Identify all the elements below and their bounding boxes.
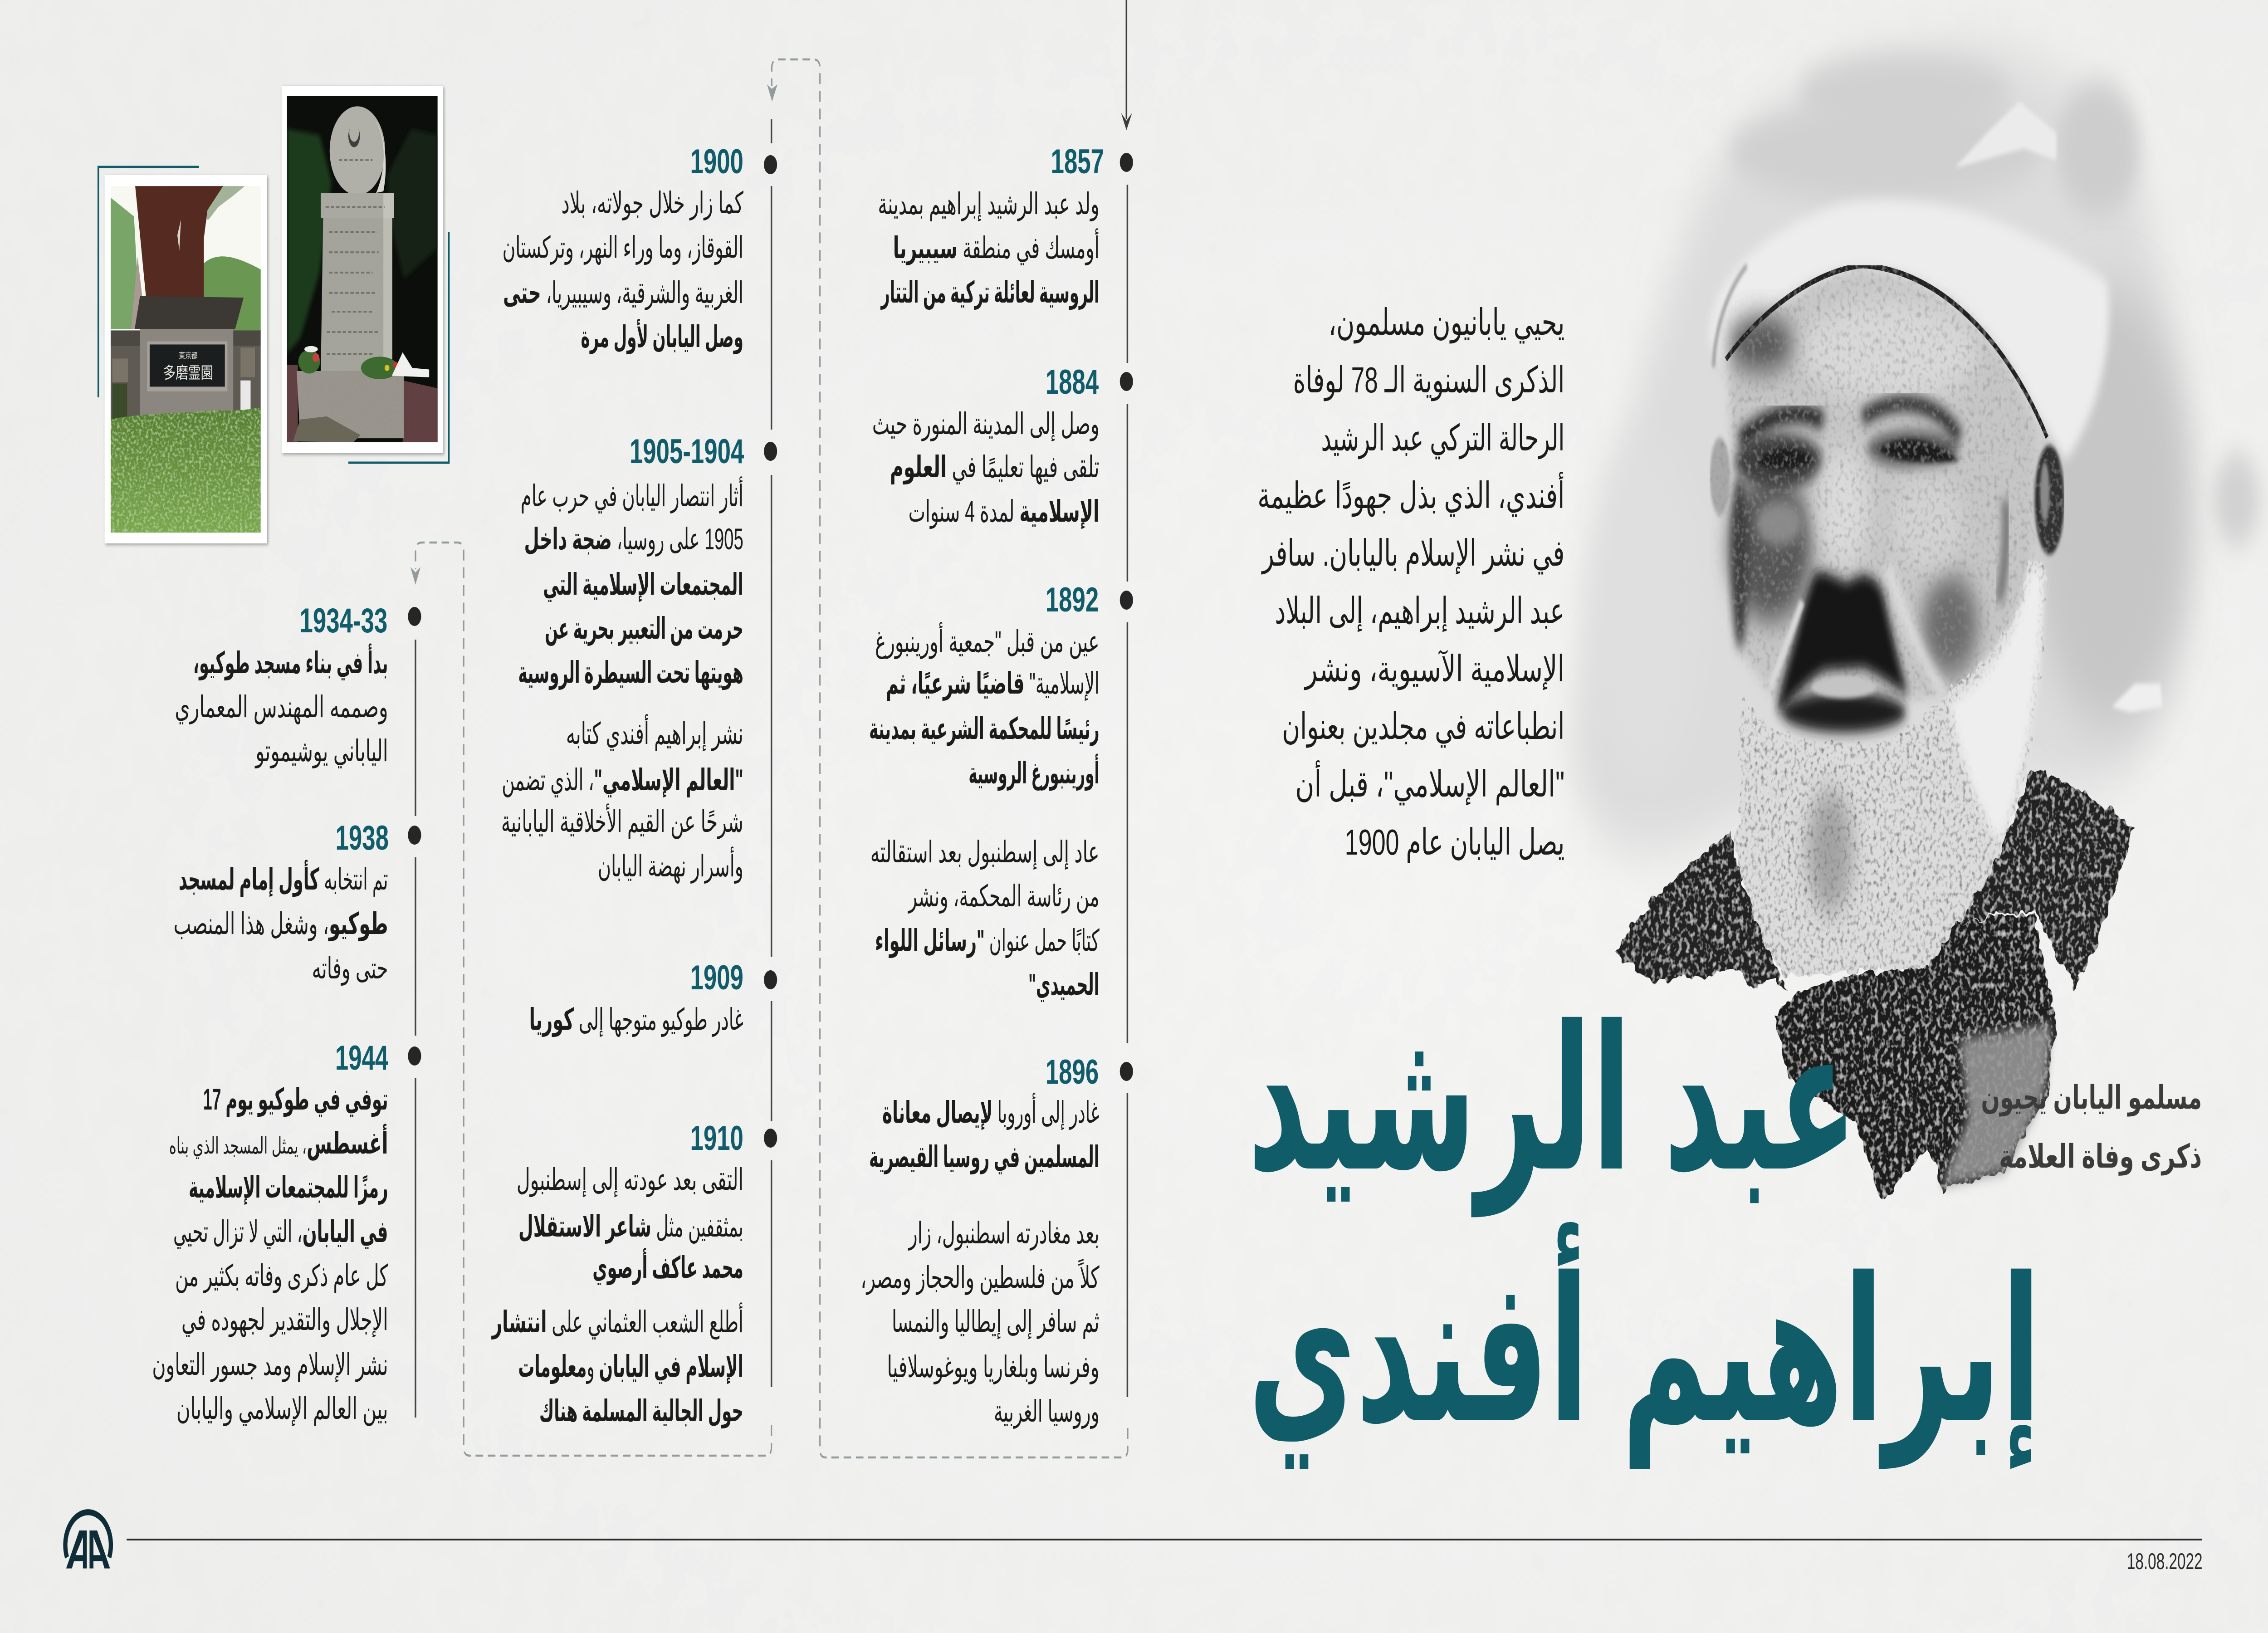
column 2 connector lines <box>770 119 772 1387</box>
arrow: timeline start <box>1121 0 1132 130</box>
entry 1896: ثم سافر إلى إيطاليا والنمسا <box>892 1305 1100 1340</box>
entry 1905-1904: 1905-1904 <box>630 432 744 470</box>
entry 1944: بين العالم الإسلامي واليابان <box>176 1393 388 1427</box>
entry 1944: في اليابان، التي لا تزال تحيي <box>173 1216 388 1249</box>
entry 1884: 1884 <box>1046 362 1099 401</box>
beard <box>1737 562 2045 976</box>
entry 1896: كلاً من فلسطين والحجاز ومصر، <box>860 1259 1100 1295</box>
entry 1934-33: بدأ في بناء مسجد طوكيو، <box>193 643 388 680</box>
photo card: Tama cemetery gate <box>105 175 267 543</box>
entry 1892: 1892 <box>1046 580 1099 619</box>
entry 1944 <box>152 1038 421 1427</box>
entry 1905-1904: هويتها تحت السيطرة الروسية <box>518 656 743 690</box>
intro paragraph <box>1257 302 1564 864</box>
faded coat patch <box>1941 1023 2052 1187</box>
entry 1896: 1896 <box>1046 1052 1099 1091</box>
entry 1896 <box>860 1052 1133 1429</box>
entry 1909: غادر طوكيو متوجها إلى كوريا <box>529 1003 743 1037</box>
photo cards <box>98 86 449 543</box>
intro paragraph: في نشر الإسلام باليابان. سافر <box>1261 533 1564 575</box>
entry 1905-1904: المجتمعات الإسلامية التي <box>543 568 743 602</box>
subtitle <box>1981 1080 2202 1175</box>
turban <box>1710 200 2109 461</box>
entry 1857: 1857 <box>1051 142 1104 181</box>
entry 1905-1904: وأسرار نهضة اليابان <box>598 846 743 884</box>
column 1 connector lines <box>1126 185 1129 1397</box>
intro paragraph: الذكرى السنوية الـ 78 لوفاة <box>1293 360 1564 401</box>
intro paragraph: "العالم الإسلامي"، قبل أن <box>1295 760 1564 806</box>
intro paragraph: أفندي، الذي بذل جهودًا عظيمة <box>1257 472 1564 517</box>
entry 1900: كما زار خلال جولاته، بلاد <box>562 187 744 220</box>
title line 2: إبراهيم أفندي <box>1248 1221 2041 1470</box>
entry 1857: ولد عبد الرشيد إبراهيم بمدينة <box>878 188 1100 222</box>
intro paragraph: عبد الرشيد إبراهيم، إلى البلاد <box>1275 591 1564 632</box>
icon: AA logo <box>65 1512 111 1569</box>
entry 1905-1904: 1905 على روسيا، ضجة داخل <box>524 523 743 557</box>
teal corner left photo <box>98 167 199 397</box>
entry 1900: القوقاز، وما وراء النهر، وتركستان <box>503 231 743 265</box>
watercolor wash <box>1571 47 2260 853</box>
entry 1909: 1909 <box>690 958 743 997</box>
dark coat <box>1615 769 2135 1203</box>
entry 1910: بمثقفين مثل شاعر الاستقلال <box>518 1210 743 1244</box>
entry 1884: وصل إلى المدينة المنورة حيث <box>872 408 1100 442</box>
entry 1910 <box>491 1119 777 1428</box>
entry 1900: وصل اليابان لأول مرة <box>581 318 743 354</box>
entry 1892: كتابًا حمل عنوان "رسائل اللواء <box>875 924 1100 958</box>
entry 1896: غادر إلى أوروبا لإيصال معاناة <box>882 1093 1100 1130</box>
entry 1909 <box>529 958 777 1037</box>
entry 1905-1904: "العالم الإسلامي"، الذي تضمن <box>502 764 743 798</box>
entry 1884: تلقى فيها تعليمًا في العلوم <box>890 451 1100 484</box>
entry 1938: حتى وفاته <box>312 952 388 986</box>
entry 1944: أغسطس، يمثل المسجد الذي بناه <box>169 1124 388 1161</box>
entry 1900: 1900 <box>690 142 743 181</box>
entry 1884: الإسلامية لمدة 4 سنوات <box>909 495 1100 529</box>
entry 1944: رمزًا للمجتمعات الإسلامية <box>189 1171 388 1205</box>
intro paragraph: الرحالة التركي عبد الرشيد <box>1321 418 1564 460</box>
timeline column 3 <box>152 601 421 1427</box>
entry 1938: طوكيو، وشغل هذا المنصب <box>174 908 388 941</box>
entry 1892: الحميدي" <box>1028 968 1100 1002</box>
footer rule <box>127 1539 2202 1540</box>
entry 1944: كل عام ذكرى وفاته بكثير من <box>175 1260 388 1293</box>
entry 1857: الروسية لعائلة تركية من التتار <box>880 276 1100 310</box>
arrow: dashed link column 1 to 2 <box>767 59 1128 1457</box>
intro paragraph: الإسلامية الآسيوية، ونشر <box>1304 649 1564 690</box>
stone inscription <box>326 160 385 354</box>
entry 1944: توفي في طوكيو يوم 17 <box>203 1083 388 1117</box>
entry 1944: نشر الإسلام ومد جسور التعاون <box>152 1349 388 1383</box>
entry 1857 <box>878 142 1133 310</box>
entry 1938: تم انتخابه كأول إمام لمسجد <box>179 860 388 897</box>
intro paragraph: يصل اليابان عام 1900 <box>1345 822 1564 864</box>
entry 1910: التقى بعد عودته إلى إسطنبول <box>517 1164 743 1198</box>
entry 1892: الإسلامية" قاضيًا شرعيًا، ثم <box>886 667 1100 701</box>
subtitle: مسلمو اليابان يحيون <box>1981 1080 2202 1116</box>
entry 1905-1904: نشر إبراهيم أفندي كتابه <box>566 714 743 752</box>
plaque lettering: 多磨霊園 <box>163 360 213 383</box>
flowers <box>298 350 320 374</box>
teal corner right photo <box>348 232 449 463</box>
entry 1934-33: وصممه المهندس المعماري <box>175 691 388 724</box>
entry 1892: من رئاسة المحكمة، ونشر <box>908 880 1100 914</box>
moustache and mouth <box>1770 566 1945 733</box>
photo card: memorial stone <box>282 86 443 453</box>
entry 1938 <box>174 818 421 986</box>
entry 1857: أومسك في منطقة سيبيريا <box>893 228 1100 265</box>
entry 1896: المسلمين في روسيا القيصرية <box>869 1141 1100 1174</box>
entry 1944: الإجلال والتقدير لجهوده في <box>181 1304 388 1338</box>
entry 1905-1904: شرحًا عن القيم الأخلاقية اليابانية <box>501 803 743 839</box>
entry 1905-1904: أثار انتصار اليابان في حرب عام <box>521 476 743 513</box>
plaque lettering: 東京都 <box>179 349 198 361</box>
entry 1934-33: 1934-33 <box>300 601 387 640</box>
arrow: dashed link column 2 to 3 <box>411 543 772 1456</box>
subtitle: ذكرى وفاة العلامة <box>1999 1139 2202 1175</box>
entry 1905-1904 <box>501 432 777 884</box>
portrait of Abdurreshid Ibrahim <box>1571 47 2260 1203</box>
column 3 connector lines <box>414 640 416 1418</box>
entry 1884 <box>872 362 1133 529</box>
entry 1910: الإسلام في اليابان ومعلومات <box>518 1350 743 1384</box>
title line 1: عبد الرشيد <box>1248 988 1857 1218</box>
timeline column 2 <box>491 119 777 1428</box>
entry 1892: عاد إلى إسطنبول بعد استقالته <box>870 836 1100 870</box>
entry 1900 <box>503 142 777 354</box>
entry 1910: حول الجالية المسلمة هناك <box>539 1395 743 1428</box>
date: 18.08.2022 <box>2127 1549 2203 1574</box>
entry 1892 <box>869 580 1133 1002</box>
entry 1934-33 <box>175 601 421 768</box>
entry 1934-33: الياباني يوشيموتو <box>254 735 388 768</box>
entry 1910: أطلع الشعب العثماني على انتشار <box>491 1302 743 1340</box>
entry 1892: رئيسًا للمحكمة الشرعية بمدينة <box>869 713 1100 746</box>
entry 1944: 1944 <box>335 1038 389 1077</box>
entry 1892: عين من قبل "جمعية أورينبورغ <box>875 622 1100 659</box>
entry 1896: بعد مغادرته اسطنبول، زار <box>908 1217 1100 1251</box>
entry 1910: 1910 <box>690 1119 743 1157</box>
timeline column 1 <box>860 142 1133 1429</box>
entry 1892: أورينبورغ الروسية <box>968 753 1100 791</box>
entry 1896: وفرنسا وبلغاريا ويوغوسلافيا <box>887 1351 1100 1384</box>
crescent <box>348 129 360 147</box>
entry 1910: محمد عاكف أرصوي <box>592 1248 743 1285</box>
title <box>1248 988 2041 1470</box>
entry 1938: 1938 <box>336 818 389 857</box>
plaque lettering <box>164 352 212 380</box>
entry 1896: وروسيا الغربية <box>994 1395 1100 1429</box>
entry 1905-1904: حرمت من التعبير بحرية عن <box>545 612 743 646</box>
entry 1900: الغربية والشرقية، وسيبيريا، حتى <box>503 277 743 310</box>
intro paragraph: يحيي يابانيون مسلمون، <box>1328 302 1564 344</box>
intro paragraph: انطباعاته في مجلدين بعنوان <box>1282 706 1564 748</box>
face <box>1710 265 2064 711</box>
